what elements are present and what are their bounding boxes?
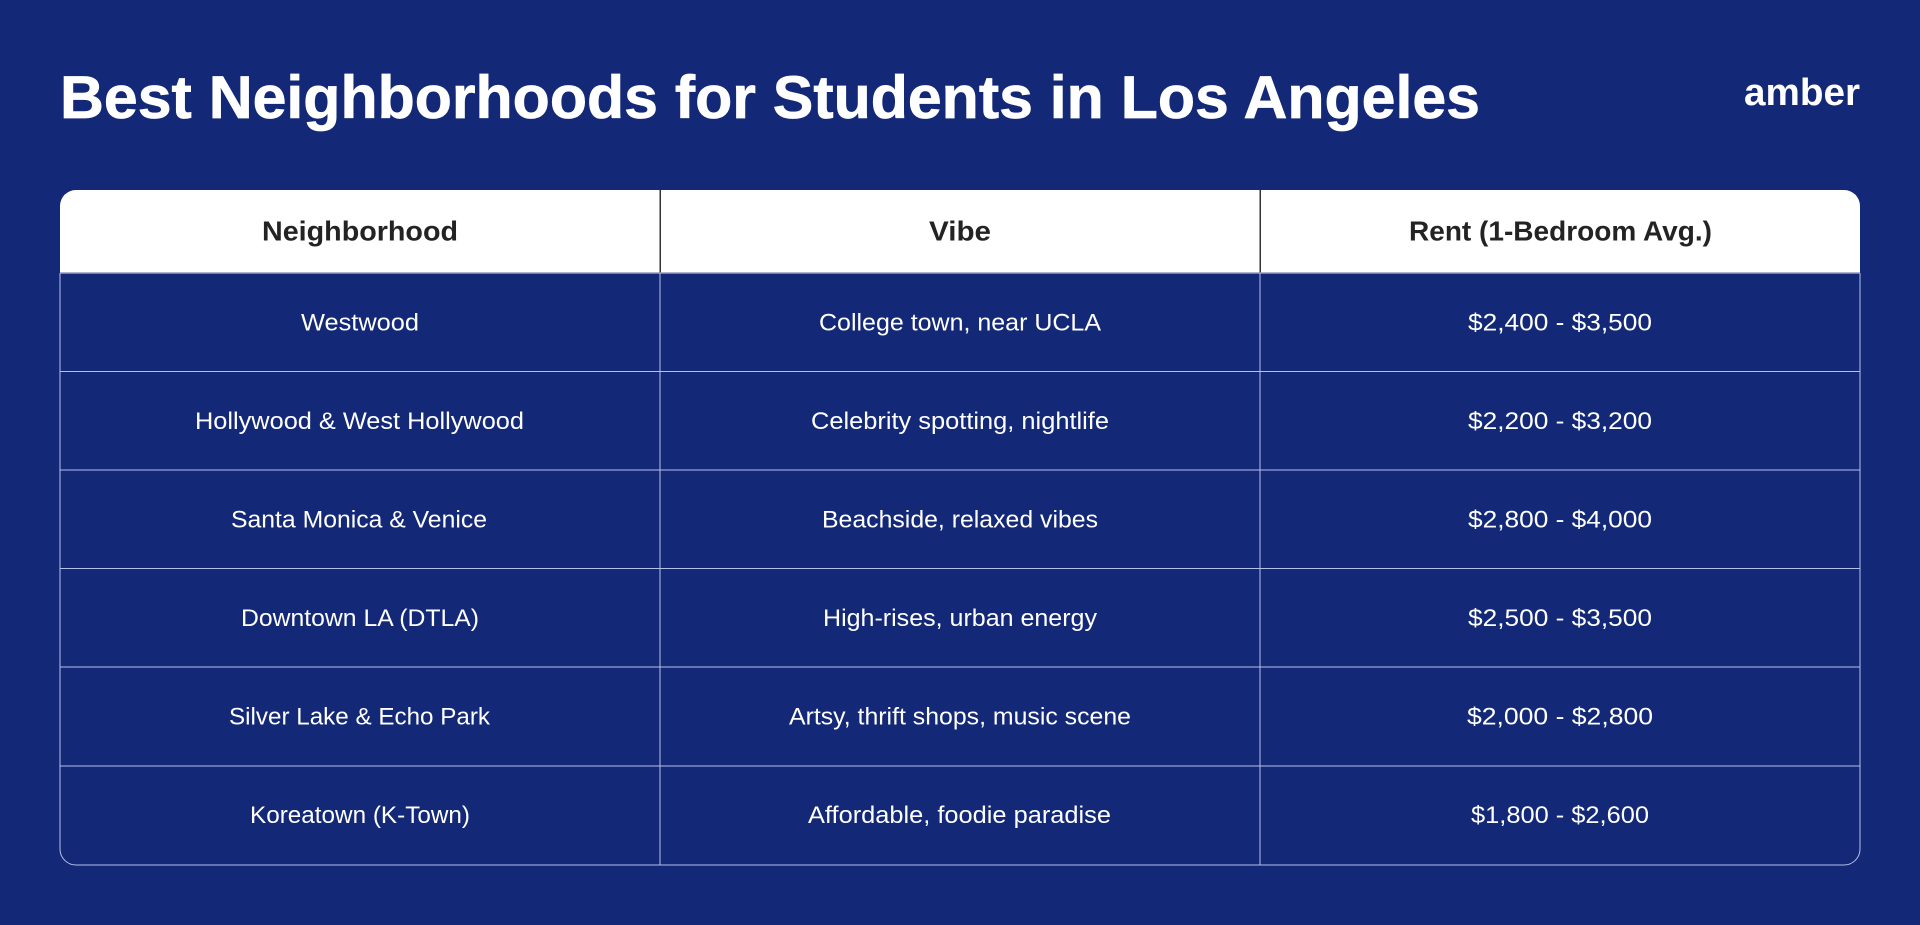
row: Silver Lake & Echo Park: Silver Lake & Echo Park (229, 704, 491, 731)
row: Santa Monica & Venice: $2,800 - $4,000 (1468, 507, 1652, 534)
row: Silver Lake & Echo Park: Artsy, thrift shops, music scene (789, 704, 1131, 731)
row: Hollywood & West Hollywood (195, 408, 1652, 435)
row: Koreatown (K-Town): $1,800 - $2,600 (1471, 802, 1649, 829)
row: Westwood: College town, near UCLA (819, 310, 1102, 337)
row: Koreatown (K-Town): Affordable, foodie paradise (808, 802, 1111, 829)
title: Best Neighborhoods for Students in Los Angeles (60, 64, 1480, 131)
row: Westwood (301, 310, 1652, 337)
row: Koreatown (K-Town) (250, 802, 1649, 829)
table header row (60, 190, 1860, 274)
header: Neighborhood: Neighborhood (262, 216, 458, 247)
row: Downtown LA (DTLA): Downtown LA (DTLA) (241, 605, 479, 632)
row: Downtown LA (DTLA) (241, 605, 1652, 632)
table (60, 190, 1860, 865)
row: Westwood: Westwood (301, 310, 419, 337)
row: Santa Monica & Venice (231, 507, 1652, 534)
row: Silver Lake & Echo Park (229, 704, 1653, 731)
header: Rent: Rent (1-Bedroom Avg.) (1409, 216, 1712, 247)
row: Downtown LA (DTLA): High-rises, urban energy (823, 605, 1098, 632)
row: Silver Lake & Echo Park: $2,000 - $2,800 (1467, 704, 1653, 731)
row: Hollywood & West Hollywood: Hollywood & West Hollywood (195, 408, 524, 435)
logo: amber: amber (1744, 72, 1860, 114)
row: Santa Monica & Venice: Beachside, relaxed vibes (822, 507, 1098, 534)
row: Hollywood & West Hollywood: Celebrity spotting, nightlife (811, 408, 1109, 435)
row: Westwood: $2,400 - $3,500 (1468, 310, 1652, 337)
row: Koreatown (K-Town): Koreatown (K-Town) (250, 802, 470, 829)
header: Vibe: Vibe (929, 216, 991, 247)
row: Santa Monica & Venice: Santa Monica & Venice (231, 507, 487, 534)
table grid lines (60, 273, 1860, 865)
row: Hollywood & West Hollywood: $2,200 - $3,200 (1468, 408, 1652, 435)
row: Downtown LA (DTLA): $2,500 - $3,500 (1468, 605, 1652, 632)
